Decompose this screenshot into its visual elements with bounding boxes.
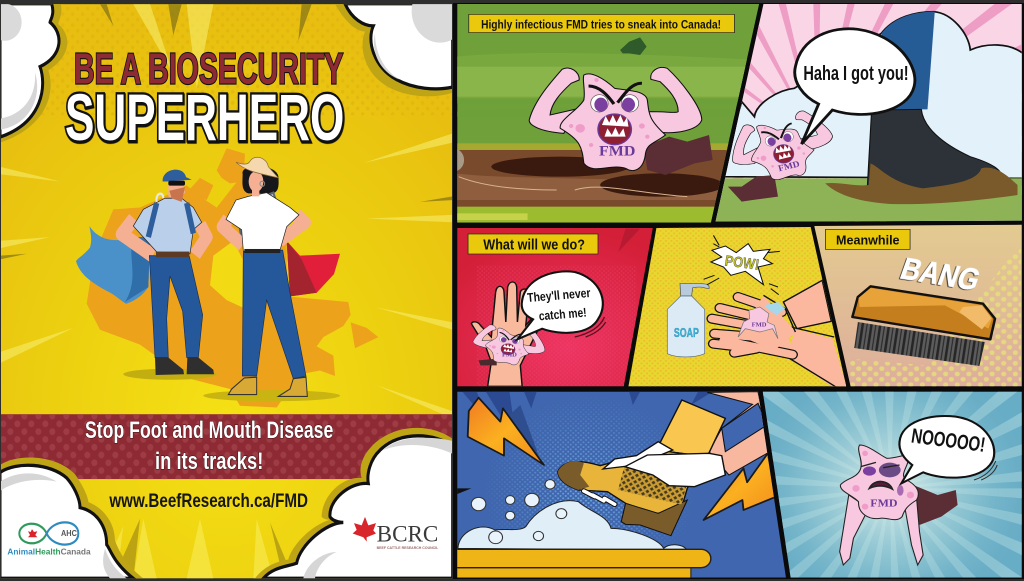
panel: boot stomps FMD <box>716 4 1022 222</box>
woman with red cape <box>203 157 340 401</box>
banner: stop foot and mouth disease <box>0 414 453 479</box>
logo: BCRC <box>353 517 439 550</box>
canada map <box>87 148 378 408</box>
soap foam <box>458 480 687 550</box>
yellow boot <box>558 400 725 536</box>
FMD villain cape <box>728 175 778 202</box>
FMD villain flexing <box>529 67 702 171</box>
title <box>64 52 345 144</box>
website url: www.BeefResearch.ca/FMD <box>109 489 308 511</box>
soap bottle <box>667 284 709 357</box>
bang sound effect: BANG <box>896 252 985 297</box>
panel: what will we do <box>455 222 658 389</box>
caption: what will we do <box>468 234 598 254</box>
panel: meanwhile brush <box>811 222 1024 389</box>
gloved hands <box>603 442 725 487</box>
speech bubble: noooo <box>899 416 997 483</box>
ground <box>709 178 1024 223</box>
squished FMD: FMD <box>752 322 767 329</box>
title: BE A BIOSECURITY <box>74 43 344 93</box>
arm <box>707 392 770 475</box>
banner: stop foot and mouth disease: Stop Foot and Mouth Disease <box>85 416 333 443</box>
caption: what will we do: What will we do? <box>483 237 585 253</box>
FMD villain being stomped: FMD <box>777 159 801 173</box>
speech bubble: noooo: NOOOOO! <box>910 423 987 457</box>
right side black gutter <box>453 3 1024 579</box>
cloud: bottom right with BCRC logo <box>255 428 453 578</box>
pow burst <box>704 235 780 295</box>
defeated FMD villain <box>840 445 923 565</box>
speech bubble: haha I got you: Haha I got you! <box>803 61 909 85</box>
squished FMD <box>738 307 778 339</box>
logo: animal health canada: AnimalHealthCanada <box>7 547 91 556</box>
logo: BCRC: BEEF CATTLE RESEARCH COUNCIL <box>377 546 439 550</box>
defeated FMD villain: FMD <box>870 498 898 510</box>
man with blue cape <box>76 170 217 380</box>
panel: biosecurity superhero poster <box>0 0 468 578</box>
lightning bolt right <box>704 453 776 520</box>
wash tub <box>448 549 711 581</box>
FMD villain cape <box>644 135 713 175</box>
speech bubble: they'll never catch me: They'll never <box>526 285 591 305</box>
caption: meanwhile: Meanwhile <box>836 232 900 248</box>
icon: small virus splat <box>620 37 647 55</box>
washing hands <box>712 280 847 387</box>
lightning bolt left <box>468 398 544 465</box>
logo: BCRC: BCRC <box>377 521 438 547</box>
panel: FMD defeated <box>760 375 1024 581</box>
logo: animal health canada <box>7 522 91 556</box>
banner: stop foot and mouth disease: in its tracks! <box>155 447 263 474</box>
speech bubble: they'll never catch me: catch me! <box>538 305 587 323</box>
caption: meanwhile <box>826 229 910 249</box>
cloud: top right <box>336 4 452 96</box>
cloud: bottom left with animal health canada logo <box>0 458 143 578</box>
cloud: top left <box>0 4 67 143</box>
speech bubble: haha I got you <box>795 29 915 144</box>
clouds behind boot <box>720 12 1024 178</box>
panel: handwashing with soap <box>626 225 851 389</box>
hand with FMD: FMD <box>502 352 517 359</box>
FMD villain flexing: FMD <box>599 143 635 159</box>
speech bubble: they'll never catch me <box>517 271 606 339</box>
FMD villain being stomped <box>732 110 833 180</box>
title: SUPERHERO <box>65 81 344 155</box>
soap bottle: SOAP <box>674 326 699 340</box>
panel: boot scrubbing <box>448 385 789 581</box>
caption: highly infectious FMD <box>469 14 734 33</box>
panel: FMD sneaks into Canada <box>442 0 760 223</box>
logo: animal health canada: AHC <box>61 529 77 538</box>
wooden brush <box>852 286 995 366</box>
hand with FMD <box>470 282 548 386</box>
giant leg and boot <box>825 12 1017 204</box>
villain cape <box>905 482 958 525</box>
caption: highly infectious FMD: Highly infectious FMD tries to sneak into Canada! <box>481 18 721 31</box>
pow burst: POW! <box>724 253 760 274</box>
